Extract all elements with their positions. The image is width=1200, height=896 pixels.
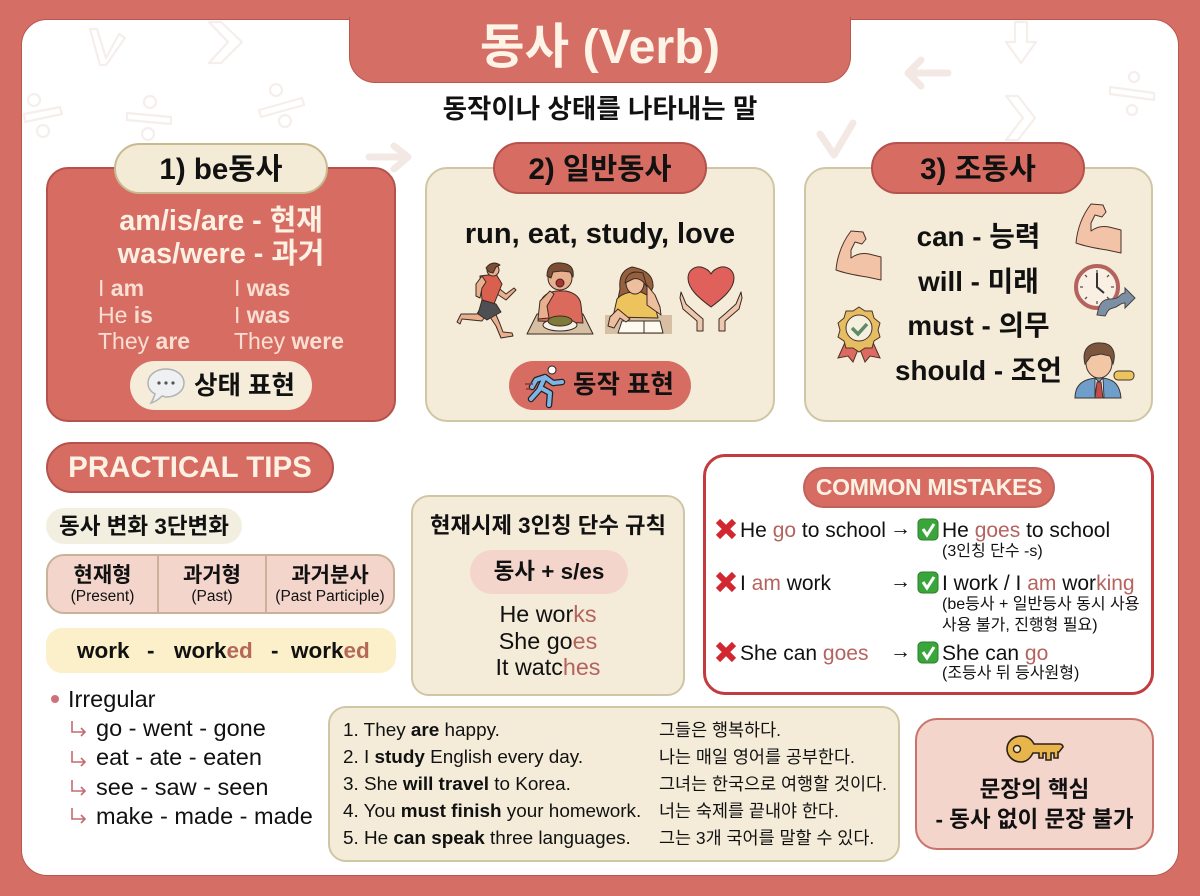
icon: blue runner: [525, 366, 566, 408]
icon: runner: [456, 262, 516, 338]
takeaway text: 문장의 핵심: [980, 777, 1089, 802]
column: past participle: [275, 564, 385, 605]
korean translations: 그녀는 한국으로 여행할 것이다.: [659, 774, 887, 794]
mistake rows: 사용 불가, 진행형 필요): [942, 617, 1098, 634]
bullet: [51, 695, 59, 703]
regular verb example: worked: [174, 638, 253, 663]
column: past: [159, 556, 267, 612]
heading pill: be verb: [114, 143, 328, 194]
irregular verb list: [51, 686, 313, 829]
conjugation examples: He is: [98, 302, 153, 328]
english sentences: 5. He can speak three languages.: [343, 828, 631, 849]
form rows: go - went - gone: [96, 715, 266, 741]
form rows: eat - ate - eaten: [96, 744, 262, 770]
panel: be verbs: [46, 167, 396, 422]
title tab: [349, 17, 851, 83]
column: past participle: 과거분사: [291, 564, 369, 587]
arrows: →: [890, 517, 911, 540]
heading pill: common mistakes: [803, 467, 1055, 508]
sub heading: three forms: [46, 508, 242, 544]
mistake rows: She can go: [942, 642, 1048, 665]
mistake rows: (be등사 + 일반등사 동시 사용: [942, 596, 1139, 613]
panel: example sentences: [328, 706, 900, 862]
modal verb meanings: can - 능력: [917, 221, 1040, 252]
modal verb meanings: [895, 221, 1062, 386]
panel: general verbs: [425, 167, 775, 422]
conjugation examples: I was: [234, 302, 290, 328]
formula pill: [470, 550, 628, 594]
english sentences: 2. I study English every day.: [343, 747, 583, 768]
icon: girl studying: [605, 266, 672, 334]
panel: third person rule: [411, 495, 685, 696]
column: past: 과거형: [183, 564, 241, 587]
arrows: [71, 721, 86, 824]
wrong markers: [716, 518, 736, 662]
regular verb example: worked: [291, 638, 370, 663]
column: past participle: (Past Participle): [275, 588, 385, 605]
english sentences: [343, 720, 641, 849]
form rows: [96, 715, 313, 829]
takeaway text: [935, 777, 1134, 832]
examples: [496, 601, 600, 680]
examples: He works: [499, 601, 597, 627]
modal verb meanings: will - 미래: [918, 266, 1039, 297]
heading pill: auxiliary verb: [871, 142, 1085, 194]
verb list: run, eat, study, love: [465, 218, 735, 250]
mistake rows: [716, 517, 1139, 682]
tag: action expression: 동작 표현: [573, 371, 674, 399]
korean translations: 그들은 행복하다.: [659, 720, 781, 740]
english sentences: 4. You must finish your homework.: [343, 801, 641, 822]
heading: was were: was/were - 과거: [118, 238, 324, 270]
form rows: see - saw - seen: [96, 774, 268, 800]
heading pill: practical tips: PRACTICAL TIPS: [68, 451, 312, 484]
right markers: [918, 518, 938, 664]
icon: flexed arm left: [836, 230, 882, 280]
wrong sentences: He go to school: [740, 519, 886, 542]
regular verb example: -: [147, 638, 154, 663]
english sentences: 3. She will travel to Korea.: [343, 774, 571, 795]
subtitle: 동작이나 상태를 나타내는 말: [443, 94, 757, 124]
panel: key takeaway: [915, 718, 1154, 850]
column: present: [48, 556, 159, 612]
mistake rows: I am work: [740, 572, 831, 595]
icon: speech bubble: [147, 368, 185, 404]
panel: auxiliary verbs: [804, 167, 1153, 422]
modal verb meanings: should - 조언: [895, 355, 1062, 386]
tag: state expression: 상태 표현: [194, 372, 295, 400]
corrected sentences: He goes to school: [942, 519, 1110, 542]
icon: flexed arm right: [1076, 204, 1122, 254]
table: verb forms: [46, 554, 395, 614]
korean translations: [659, 720, 887, 848]
sub heading: three forms: 동사 변화 3단변화: [59, 514, 229, 539]
modal verb meanings: must - 의무: [907, 310, 1050, 341]
heading: am is are: am/is/are - 현재: [119, 205, 323, 237]
heading pill: practical tips: [46, 442, 334, 493]
conjugation examples: They were: [234, 328, 344, 354]
formula pill: 동사 + s/es: [494, 559, 604, 584]
korean translations: 너는 숙제를 끝내야 한다.: [659, 801, 839, 821]
mistake rows: I work / I am working: [942, 572, 1135, 595]
takeaway text: - 동사 없이 문장 불가: [935, 807, 1134, 832]
icon: man eating: [526, 262, 594, 334]
english sentences: 1. They are happy.: [343, 720, 500, 741]
panel: common mistakes: [703, 454, 1154, 695]
korean translations: 나는 매일 영어를 공부한다.: [659, 747, 855, 767]
mistake rows: →: [890, 570, 911, 593]
examples: She goes: [499, 628, 597, 654]
column: present: 현재형: [74, 564, 131, 587]
icon: heart in hands: [680, 266, 742, 332]
icon: key: [1006, 735, 1064, 763]
examples: It watches: [496, 654, 600, 680]
icon: clock with arrow: [1074, 264, 1136, 316]
korean translations: 그는 3개 국어를 말할 수 있다.: [659, 828, 874, 848]
heading pill: be verb: 1) be동사: [159, 153, 283, 186]
heading pill: general verb: [493, 142, 707, 194]
regular verb example: work: [77, 638, 130, 663]
icon: businessman advising: [1074, 342, 1134, 398]
label: irregular: Irregular: [68, 686, 156, 712]
heading pill: general verb: 2) 일반동사: [528, 153, 672, 186]
title tab: 동사 (Verb): [480, 20, 720, 74]
column: present: (Present): [71, 588, 134, 605]
regular verb example: [46, 628, 396, 673]
conjugation examples: I am: [98, 275, 144, 301]
heading pill: common mistakes: COMMON MISTAKES: [816, 474, 1042, 500]
conjugation examples: I was: [234, 275, 290, 301]
mistake rows: →: [890, 640, 911, 663]
explanations: (3인칭 단수 -s): [942, 543, 1043, 560]
form rows: make - made - made: [96, 803, 313, 829]
tag: state expression: [130, 361, 312, 410]
tag: action expression: [509, 361, 691, 410]
column: past: (Past): [191, 588, 233, 605]
conjugation examples: [98, 275, 344, 354]
mistake rows: She can goes: [740, 642, 868, 665]
heading pill: auxiliary verb: 3) 조동사: [920, 153, 1036, 186]
conjugation examples: They are: [98, 328, 190, 354]
icon: ribbon badge: [837, 306, 881, 363]
regular verb example: -: [271, 638, 278, 663]
rule heading: 현재시제 3인칭 단수 규칙: [430, 513, 666, 538]
mistake rows: (조등사 뒤 등사원형): [942, 665, 1079, 682]
